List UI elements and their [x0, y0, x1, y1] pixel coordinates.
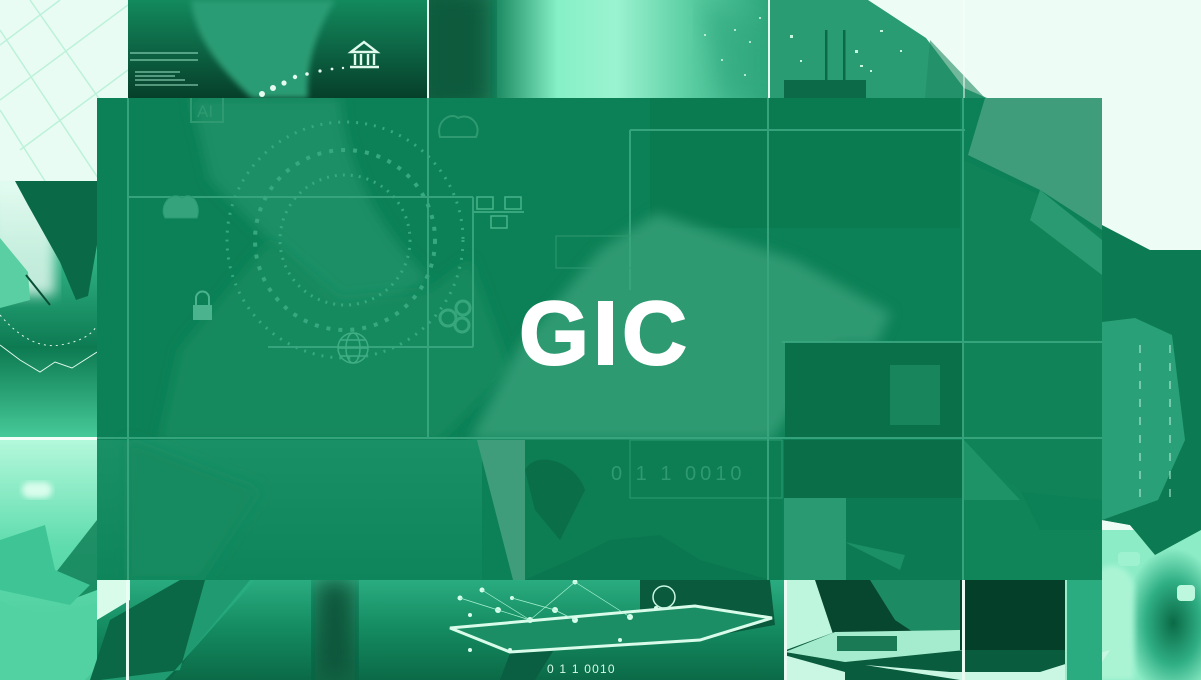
- icon: AI box: AI: [197, 102, 213, 121]
- panel: translucent green overlay: [97, 96, 1102, 580]
- lower centre panels: [477, 440, 525, 580]
- panel: top city skyline: [770, 0, 987, 98]
- right lower panels: [784, 440, 962, 498]
- icon: network nodes: [458, 580, 658, 652]
- icon: padlock: [193, 292, 212, 320]
- dotted radial rings: [227, 122, 463, 358]
- lower left area: [97, 440, 482, 540]
- icon: cloud left: [163, 196, 198, 218]
- icon: AI box: [191, 96, 223, 122]
- panel: bottom centre network tablet photo: [90, 580, 787, 680]
- data box: [556, 236, 631, 268]
- panel: left trading photo: [0, 175, 97, 437]
- icon: globe: [338, 333, 368, 363]
- panel: lower right mint photo: [1092, 520, 1201, 680]
- left dark photo zone: [194, 98, 424, 298]
- icon: tablet outline: [450, 606, 772, 652]
- right wedge and hand: [968, 98, 1102, 230]
- panel: bottom right laptop photo: [784, 580, 1110, 680]
- text: code snippet lines: [130, 53, 198, 85]
- icon: network computers: [474, 197, 524, 228]
- decorative bright frame lines: [428, 0, 964, 98]
- icon: gears: [440, 301, 470, 332]
- text: binary digits: 0 1 1 0010: [547, 662, 616, 676]
- icon: cloud right: [439, 116, 478, 137]
- central light wedge: [470, 213, 891, 440]
- panel: right hand photo: [1102, 225, 1201, 555]
- icon: dotted arc: [259, 67, 344, 97]
- panel: top dark finance photo: [128, 0, 428, 98]
- panel: top middle gradient photo: [429, 0, 768, 98]
- text: faint binary: 0 1 1 0010: [611, 463, 746, 485]
- frame lines: [97, 98, 1102, 580]
- icon: bank building: [350, 42, 379, 67]
- panel: bottom left hands photo: [0, 437, 142, 680]
- title: GIC: [519, 284, 687, 384]
- icon: lock circle: [653, 586, 675, 608]
- panel: top left light lattice: [0, 0, 128, 181]
